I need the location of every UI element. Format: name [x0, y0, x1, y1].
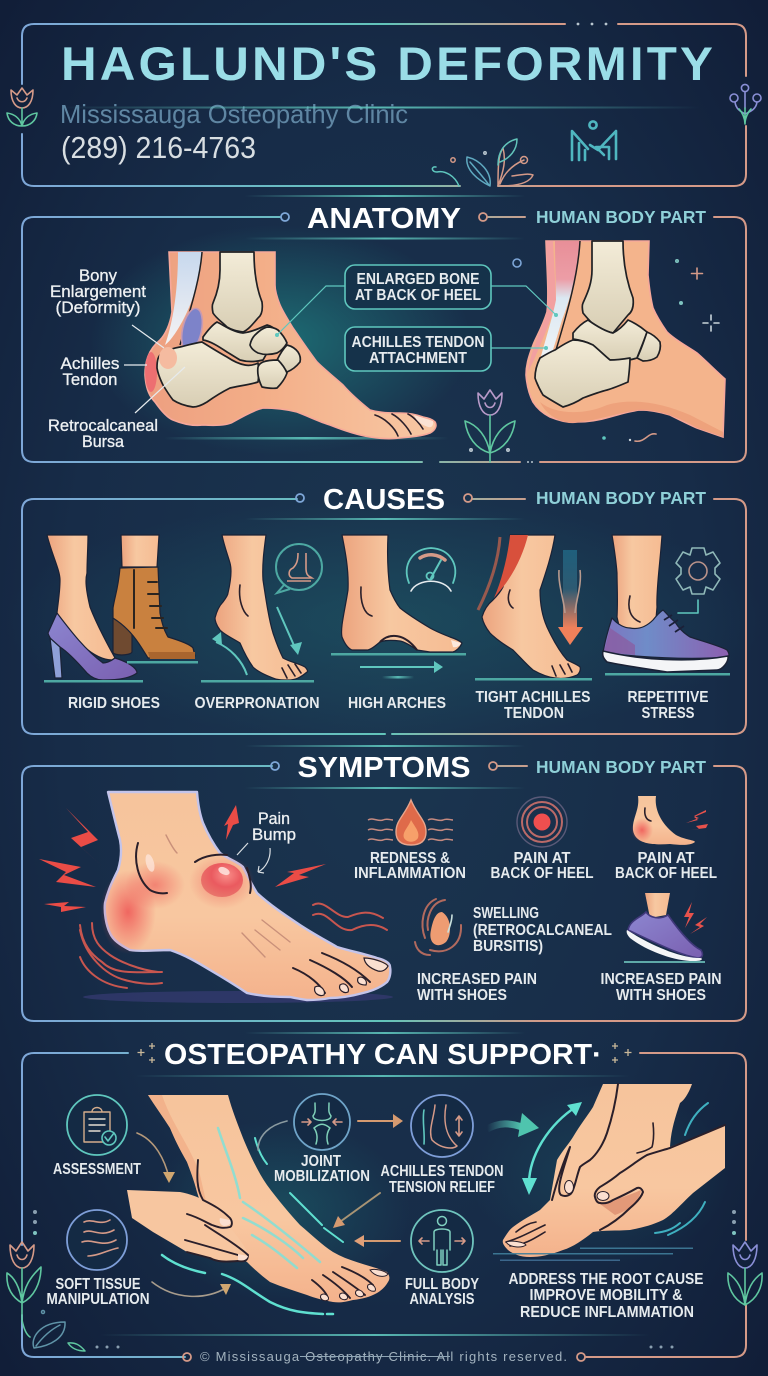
cause: tight achilles tendon: TENDON [504, 705, 564, 722]
treatment: assessment [53, 1095, 175, 1183]
callout: achilles attachment: ACHILLES TENDON [352, 334, 484, 351]
label: HIGH ARCHES [348, 695, 446, 712]
labels: left foot: Enlargement [50, 283, 146, 301]
treatment: assessment: ASSESSMENT [53, 1161, 141, 1178]
arrow: teal to treatment [487, 1113, 539, 1137]
label: RIGID SHOES [68, 695, 160, 712]
phone number: (289) 216-4763 [61, 130, 256, 165]
treatment: joint mobilization: JOINT [301, 1153, 341, 1170]
panel: symptoms [22, 752, 746, 1021]
symptom: increased pain with shoes (right) [600, 893, 722, 1004]
clinic name: Mississauga Osteopathy Clinic [60, 99, 408, 129]
icon: clinic logo [572, 121, 616, 160]
callout: achilles attachment [345, 327, 548, 371]
icon: leaf decoration [432, 139, 533, 186]
symptom: swelling: (RETROCALCANEAL [473, 922, 612, 939]
big swollen foot [39, 792, 393, 1003]
label: pain bump: Bump [252, 826, 296, 844]
symptom: pain at back of heel target [490, 797, 594, 882]
leader lines [124, 325, 185, 413]
label: OVERPRONATION [194, 695, 320, 712]
title: HAGLUND'S DEFORMITY [61, 37, 716, 90]
symptom: increased pain with shoes (left): WITH SHOES [417, 987, 507, 1004]
treatment: full body analysis: ANALYSIS [410, 1291, 474, 1308]
label: pain bump [237, 810, 296, 873]
icon: left flower [7, 1242, 41, 1337]
conclusion text: IMPROVE MOBILITY & [530, 1287, 682, 1304]
treatment: achilles tendon tension relief [333, 1095, 504, 1228]
symptom: swelling: SWELLING [473, 905, 539, 922]
icon: leaves [33, 1310, 85, 1351]
symptom: pain at back of heel foot: BACK OF HEEL [615, 865, 717, 882]
callout: enlarged bone: ENLARGED BONE [356, 271, 480, 288]
symptom: swelling: BURSITIS) [473, 938, 543, 955]
icon: flower [465, 390, 515, 462]
foot with hand [127, 1095, 389, 1314]
left foot cutaway [124, 252, 436, 439]
treatment: achilles tendon tension relief: ACHILLES TENDON [380, 1163, 504, 1180]
symptom: swelling [415, 899, 612, 955]
treatment: joint mobilization [258, 1094, 370, 1185]
symptom: increased pain with shoes (left) [417, 971, 537, 1004]
heading: OSTEOPATHY CAN SUPPORT· [164, 1039, 602, 1071]
subheading: HUMAN BODY PART [536, 207, 706, 227]
heading: SYMPTOMS [298, 752, 470, 784]
cause: rigid shoes [44, 535, 198, 712]
heading: CAUSES [323, 484, 445, 516]
callout: achilles attachment: ATTACHMENT [369, 350, 467, 367]
treatment: soft tissue manipulation: SOFT TISSUE [56, 1276, 140, 1293]
symptom: increased pain with shoes (right): WITH SHOES [616, 987, 706, 1004]
conclusion text [508, 1271, 704, 1321]
cause: tight achilles tendon [475, 535, 592, 722]
labels: left foot: Bony [79, 267, 118, 285]
cause: high arches [331, 535, 466, 712]
pain bolts [39, 805, 326, 912]
decorative marks [513, 259, 719, 441]
labels: left foot: (Deformity) [56, 299, 140, 317]
sparkles [138, 1043, 632, 1063]
callout: enlarged bone [275, 265, 558, 337]
label: TIGHT ACHILLES [476, 689, 590, 706]
panel: anatomy [22, 203, 746, 463]
footer text: © Mississauga Osteopathy Clinic. All rights reserved. [200, 1349, 567, 1364]
labels: left foot: Tendon [62, 371, 118, 389]
treatment: soft tissue manipulation [46, 1210, 231, 1308]
hands treating foot [493, 1084, 725, 1261]
right foot cutaway [526, 241, 725, 437]
labels: left foot: Bursa [82, 433, 125, 451]
panel: header [7, 23, 761, 186]
panel: causes [4, 484, 764, 747]
panel: osteopathy support [7, 1039, 762, 1364]
label: pain bump: Pain [258, 810, 290, 828]
symptom: redness and inflammation: INFLAMMATION [354, 865, 466, 882]
cause: repetitive stress: STRESS [642, 705, 694, 722]
arrow: joint to achilles [358, 1114, 403, 1128]
symptom: pain at back of heel foot: PAIN AT [638, 850, 695, 867]
label: REPETITIVE [628, 689, 708, 706]
symptom: pain at back of heel foot [615, 796, 717, 882]
callout: enlarged bone: AT BACK OF HEEL [355, 287, 481, 304]
icon: right flower [730, 84, 761, 124]
conclusion text: ADDRESS THE ROOT CAUSE [508, 1271, 704, 1288]
conclusion text: REDUCE INFLAMMATION [520, 1304, 694, 1321]
icon: left flower [7, 88, 37, 126]
subheading: HUMAN BODY PART [536, 757, 706, 777]
symptom: redness and inflammation: REDNESS & [370, 850, 450, 867]
symptom: pain at back of heel target: PAIN AT [514, 850, 571, 867]
icon: right flower [728, 1242, 762, 1305]
treatment: full body analysis: FULL BODY [405, 1276, 480, 1293]
symptom: increased pain with shoes (left): INCREASED PAIN [417, 971, 537, 988]
treatment: soft tissue manipulation: MANIPULATION [46, 1291, 150, 1308]
symptom: increased pain with shoes (right): INCREASED PAIN [600, 971, 722, 988]
cause: repetitive stress [603, 535, 730, 722]
labels: left foot [48, 267, 158, 451]
cause: overpronation [194, 535, 322, 712]
treatment: joint mobilization: MOBILIZATION [274, 1168, 370, 1185]
heading: ANATOMY [307, 203, 461, 235]
treatment: full body analysis [354, 1210, 480, 1308]
labels: left foot: Achilles [60, 355, 120, 373]
labels: left foot: Retrocalcaneal [48, 417, 158, 435]
treatment: achilles tendon tension relief: TENSION RELIEF [389, 1179, 495, 1196]
pain waves [80, 904, 387, 988]
dots decoration [33, 1210, 736, 1348]
symptom: pain at back of heel target: BACK OF HEEL [490, 865, 594, 882]
symptom: redness and inflammation [354, 800, 466, 882]
subheading: HUMAN BODY PART [536, 488, 706, 508]
